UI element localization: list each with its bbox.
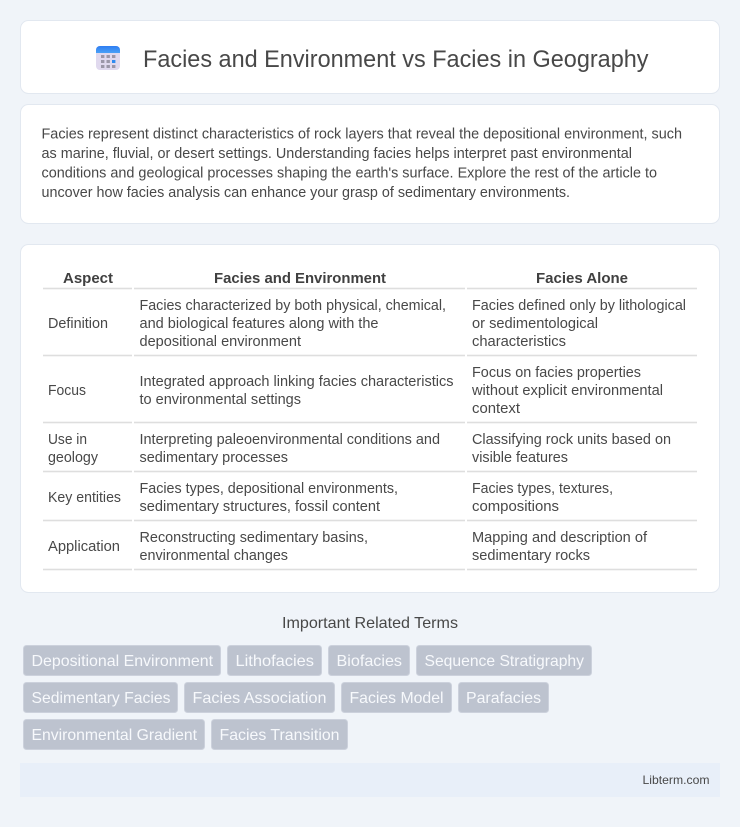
row: application: Reconstructing sedimentary basins, [140,530,368,546]
row: application: Application [48,539,120,555]
panel: comparison table [20,244,720,592]
row: use in geology: Use in [48,432,87,448]
row: focus: Focus [48,383,86,399]
panel: header [20,20,720,94]
panel: related term tags [24,646,592,750]
row: definition: Definition [48,316,108,332]
panel: related term tags: Parafacies [466,690,541,707]
row: definition: depositional environment [140,334,301,350]
row: focus: without explicit environmental [471,383,663,399]
panel: related term tags: Sequence Stratigraphy [424,653,584,670]
row: focus: Integrated approach linking facies characteristics [140,374,454,390]
footer [20,763,720,797]
panel: related term tags: Depositional Environment [32,653,214,670]
footer: Libterm.com [642,773,710,787]
table header: Facies and Environment [214,270,386,287]
row: focus: context [472,401,520,417]
text block: intro paragraph: Facies represent distinct characteristics of rock layers that reveal the depositional environment, such [42,126,682,142]
row: application: environmental changes [140,548,288,564]
row: focus: to environmental settings [140,392,301,408]
row: definition: or sedimentological [472,316,598,332]
panel: related term tags: Lithofacies [236,653,314,670]
row: key entities: Facies types, depositional environments, [140,481,398,497]
heading: important related terms: Important Related Terms [282,615,458,632]
panel: related term tags: Facies Association [192,690,326,707]
row: use in geology [43,432,697,472]
row: key entities: Facies types, textures, [472,481,613,497]
row: definition: Facies defined only by lithological [472,298,686,314]
row: application: sedimentary rocks [472,548,590,564]
row: definition: Facies characterized by both physical, chemical, [140,298,446,314]
row: key entities: sedimentary structures, fossil content [140,499,380,515]
row: application [43,530,697,570]
text block: intro paragraph [42,126,682,201]
text block: intro paragraph: as marine, fluvial, or desert settings. Understanding facies helps interpret past environmental [42,146,632,162]
panel: related term tags: Biofacies [336,653,402,670]
row: definition: and biological features along with the [140,316,378,332]
row: use in geology: visible features [472,450,568,466]
row: focus [43,365,697,423]
text block: intro paragraph: uncover how facies analysis can enhance your grasp of sedimentary environments. [42,185,570,201]
panel: related term tags: Environmental Gradient [32,727,198,744]
panel: related term tags: Sedimentary Facies [32,690,170,707]
text block: intro paragraph: conditions and geological processes shaping the earth's surface. Explore the rest of the article to [42,166,657,182]
panel: introduction [20,104,720,224]
panel: related term tags: Facies Transition [220,727,340,744]
row: key entities: Key entities [48,490,121,506]
row: use in geology: geology [48,450,99,466]
row: definition: characteristics [472,334,566,350]
title: Facies and Environment vs Facies in Geography [143,46,648,73]
table header: Aspect [63,270,113,287]
icon: calendar [96,46,120,70]
panel: related term tags: Facies Model [350,690,444,707]
row: use in geology: Classifying rock units based on [472,432,671,448]
row: key entities: compositions [472,499,559,515]
row: application: Mapping and description of [472,530,648,546]
table header: Facies Alone [536,270,628,287]
table header [43,270,697,289]
row: use in geology: Interpreting paleoenvironmental conditions and [140,432,440,448]
row: focus: Focus on facies properties [472,365,641,381]
row: use in geology: sedimentary processes [140,450,288,466]
row: key entities [43,481,697,521]
row: definition [43,298,697,356]
